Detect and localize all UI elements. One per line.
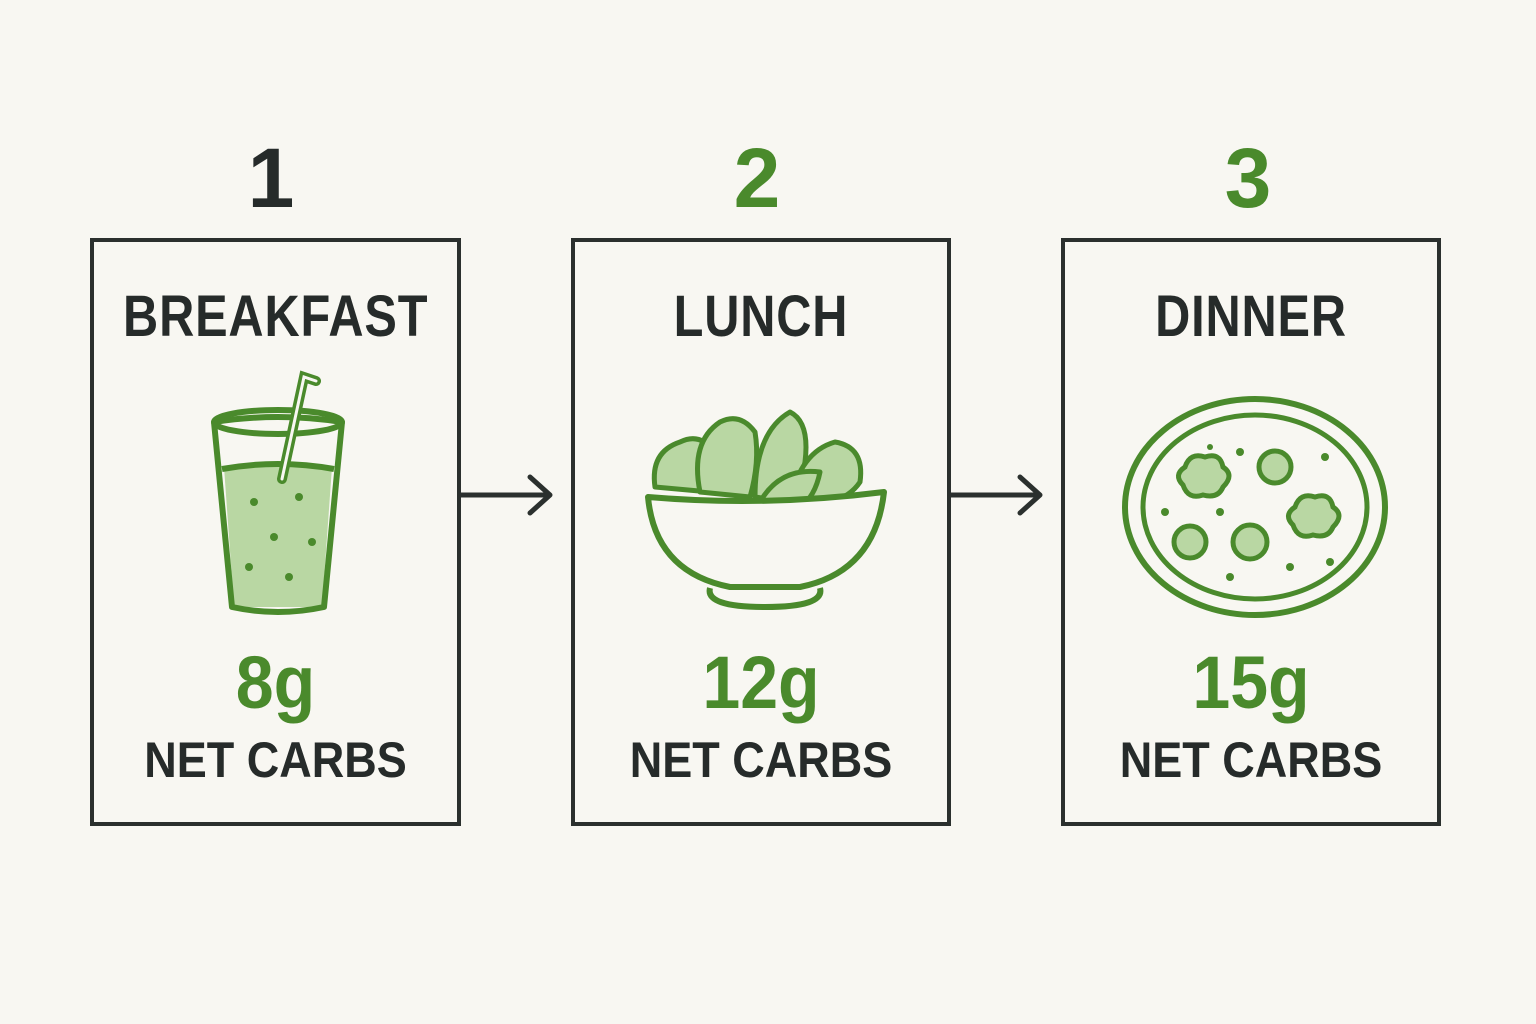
- heading: breakfast: BREAKFAST: [123, 284, 428, 349]
- panel: breakfast: [90, 238, 461, 826]
- step number 1: 1: [248, 131, 294, 225]
- icon: salad bowl: [645, 410, 887, 610]
- label: net carbs: NET CARBS: [630, 732, 892, 788]
- panel: dinner: [1061, 238, 1441, 826]
- label: net carbs: NET CARBS: [144, 732, 407, 788]
- arrow 2: [951, 474, 1042, 516]
- arrow 1: [461, 474, 552, 516]
- heading: lunch: LUNCH: [674, 284, 848, 349]
- icon: green smoothie glass: [211, 370, 345, 615]
- value: 12g: 12g: [702, 641, 820, 724]
- step number 2: 2: [734, 131, 780, 225]
- value: 15g: 15g: [1192, 641, 1310, 724]
- step number 3: 3: [1225, 131, 1271, 225]
- value: 8g: 8g: [236, 641, 315, 724]
- panel: lunch: [571, 238, 951, 826]
- heading: dinner: DINNER: [1155, 284, 1347, 349]
- icon: pizza/omelette plate: [1122, 396, 1388, 618]
- label: net carbs: NET CARBS: [1120, 732, 1382, 788]
